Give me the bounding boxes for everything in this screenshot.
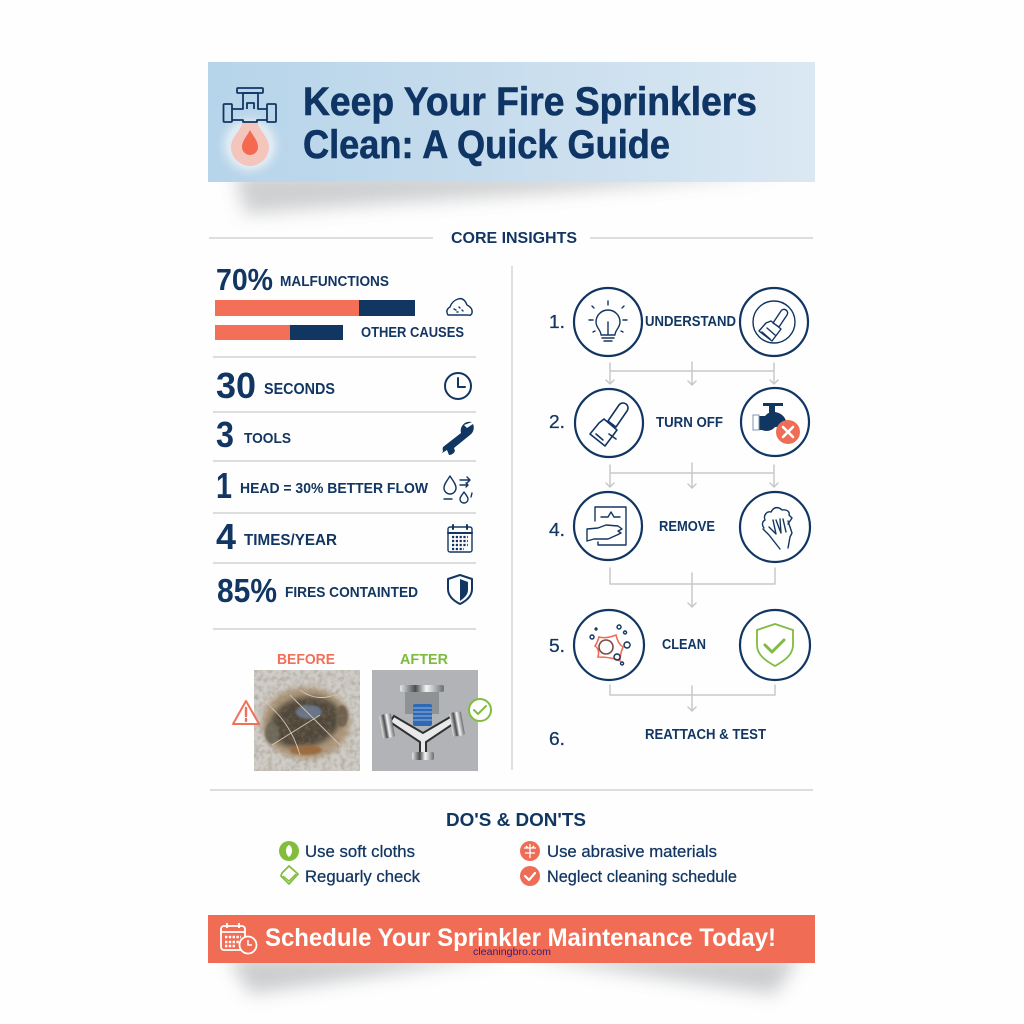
icon: warning triangle [233, 701, 259, 724]
stat: 3 tools [216, 414, 474, 455]
stat: 4 times per year [216, 516, 472, 557]
step 6: reattach and test: REATTACH & TEST [645, 727, 766, 743]
stat: 4 times per year: 4 [216, 516, 236, 557]
step 5: clean [549, 610, 810, 680]
step 4: remove: REMOVE [659, 519, 715, 535]
arrows: step 1 to 2 [606, 362, 778, 385]
stat: 1 head better flow: HEAD = 30% BETTER FLOW [240, 480, 429, 497]
stat: 70% malfunctions with bars [215, 262, 472, 341]
icon: drops and arrows [444, 476, 472, 503]
step 4: remove: 4. [549, 520, 565, 540]
do: regularly check: Reguarly check [305, 868, 421, 886]
icon: green check [469, 699, 491, 721]
icon: green shield check [757, 624, 793, 666]
header shadow [235, 172, 780, 214]
step 2: turn off [549, 388, 809, 457]
icon: light bulb [589, 301, 627, 341]
step 2: turn off: TURN OFF [656, 415, 723, 431]
don't: neglect schedule: Neglect cleaning schedule [547, 868, 737, 886]
icon: hand wiping panel [587, 507, 626, 545]
header banner [208, 62, 815, 182]
call to action banner [208, 915, 815, 963]
arrows: step 2 to 4 [606, 463, 778, 488]
watermark: cleaningbro.com [473, 946, 551, 958]
stat: 1 head better flow: 1 [216, 465, 232, 506]
icon: hand with cloth [762, 508, 792, 549]
step 1: understand: UNDERSTAND [645, 314, 736, 330]
footer shadow [228, 956, 800, 994]
icon: clock [445, 373, 471, 399]
heading: core insights: CORE INSIGHTS [451, 230, 577, 247]
stat: 85% fires contained: 85% [217, 572, 277, 609]
step 5: clean: CLEAN [662, 637, 706, 653]
icon: shield [448, 575, 472, 604]
label: before: BEFORE [277, 651, 335, 668]
icon: tap with red cross [753, 403, 800, 444]
title: Keep Your Fire Sprinklers [303, 80, 757, 124]
heading: DO'S & DON'TS [446, 810, 586, 830]
panel: statistics [213, 262, 476, 629]
do: soft cloths: Use soft cloths [305, 843, 415, 861]
panel: before and after [233, 651, 491, 771]
step 5: clean: 5. [549, 636, 565, 656]
infographic canvas [208, 62, 815, 1000]
stat: 4 times per year: TIMES/YEAR [244, 532, 337, 549]
stat: 30 seconds: 30 [216, 365, 256, 406]
call to action text: Schedule Your Sprinkler Maintenance Today! [265, 924, 776, 952]
stat: 70% malfunctions with bars: 70% [216, 262, 273, 297]
stat: 70% malfunctions with bars: MALFUNCTIONS [280, 274, 389, 290]
step 2: turn off: 2. [549, 412, 565, 432]
panel: process steps [549, 288, 810, 749]
icon: calendar [448, 525, 472, 552]
stat: 1 head better flow [216, 465, 472, 506]
icon: calendar clock [221, 923, 256, 954]
stat: 85% fires contained: FIRES CONTAINTED [285, 584, 418, 601]
step 6: reattach and test [549, 727, 766, 749]
icon: sprinkler valve with drop [216, 88, 284, 179]
icon: brush in ring [753, 301, 795, 343]
icon: soap and bubbles [590, 625, 630, 665]
stat: 3 tools: TOOLS [244, 430, 291, 447]
arrows: step 4 to 5 [610, 568, 775, 607]
panel: do's and don'ts [279, 810, 737, 886]
step 4: remove [549, 492, 810, 562]
stat: 30 seconds [216, 365, 471, 406]
stat: 3 tools: 3 [216, 414, 234, 455]
don't: abrasive materials: Use abrasive materials [547, 843, 717, 861]
icon: wrench [442, 422, 474, 455]
photo: dirty sprinkler [254, 670, 360, 771]
stat: 85% fires contained [217, 572, 472, 609]
column divider [511, 266, 513, 770]
title: Clean: A Quick Guide [303, 123, 670, 167]
step 6: reattach and test: 6. [549, 729, 565, 749]
photo: clean sprinkler [372, 670, 478, 771]
label: after: AFTER [400, 651, 448, 668]
title [303, 80, 757, 167]
icon: paint brush [590, 403, 628, 446]
arrows: step 5 to 6 [610, 685, 775, 711]
step 1: understand: 1. [549, 312, 565, 332]
stat: 70% malfunctions with bars: OTHER CAUSES [361, 325, 464, 341]
stat: 30 seconds: SECONDS [264, 381, 335, 398]
step 1: understand [549, 288, 808, 356]
